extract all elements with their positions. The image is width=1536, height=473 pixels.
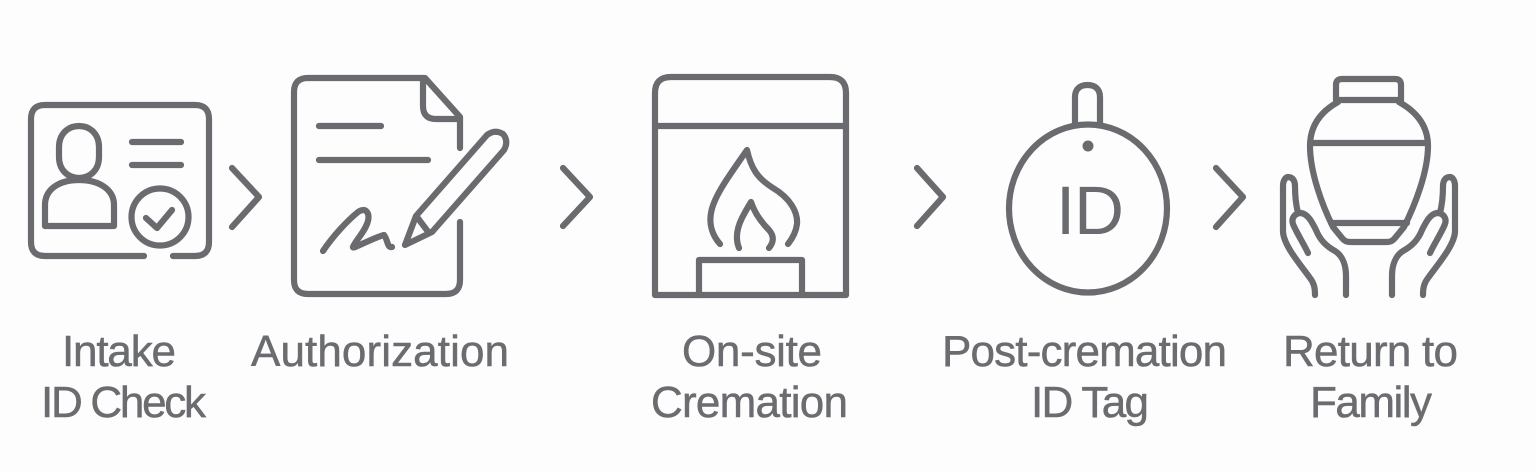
label: Intake ID Check: Intake (62, 327, 176, 376)
label: Authorization: Authorization (251, 327, 509, 376)
icon: document with signature and pen (294, 78, 506, 294)
label: Return to Family: Family (1310, 378, 1432, 427)
left hand (1283, 177, 1346, 295)
label: Return to Family (1283, 327, 1458, 427)
label: On-site Cremation: Cremation (651, 378, 848, 427)
arrow 1 (232, 168, 259, 227)
icon: cremation chamber with flame (655, 77, 846, 295)
icon: ID card with person and check (31, 105, 209, 256)
tag text: ID: ID (1056, 172, 1124, 249)
label: Post-cremation ID Tag: ID Tag (1031, 378, 1149, 427)
right hand (1392, 177, 1455, 295)
arrow 2 (563, 168, 590, 226)
arrow 3 (917, 168, 943, 226)
arrow 4 (1216, 168, 1243, 227)
label: Post-cremation ID Tag (942, 327, 1227, 427)
label: On-site Cremation: On-site (682, 327, 822, 376)
icon: urn held in two hands (1283, 79, 1455, 295)
label: Intake ID Check: ID Check (41, 378, 207, 427)
label: Return to Family: Return to (1283, 327, 1458, 376)
label: On-site Cremation (651, 327, 848, 427)
label: Intake ID Check (41, 327, 207, 427)
label: Post-cremation ID Tag: Post-cremation (942, 327, 1227, 376)
icon: post-cremation ID tag (1009, 85, 1167, 292)
